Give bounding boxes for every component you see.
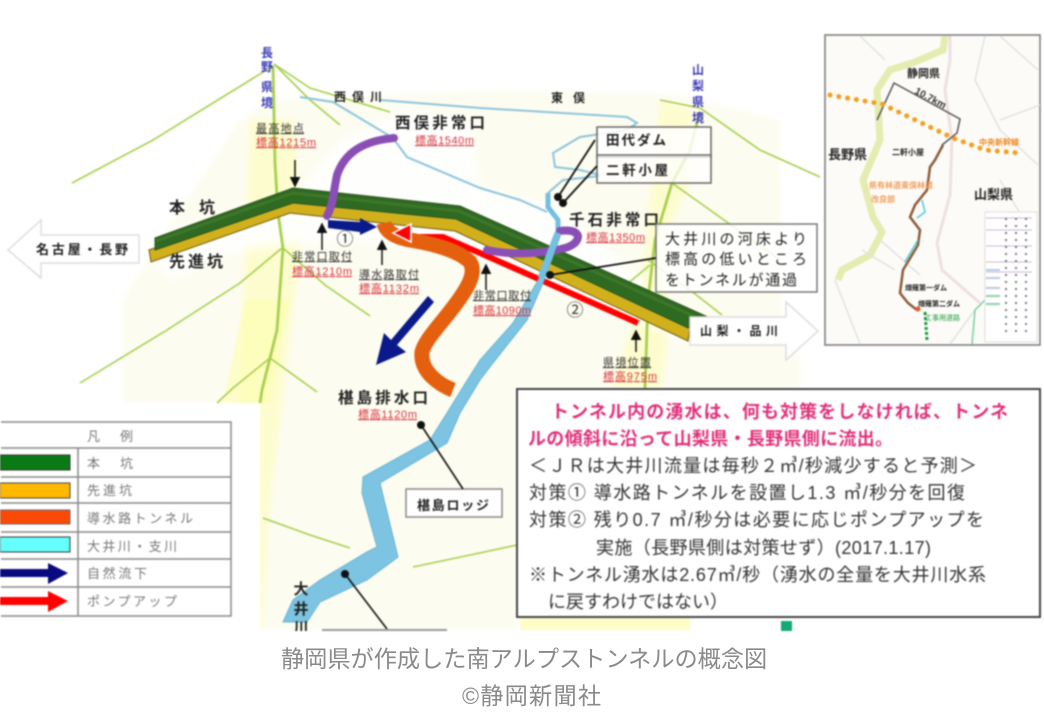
Senjaku exit label xyxy=(569,211,659,244)
left direction arrow: Nagoya and Nagano: 名古屋・長野 xyxy=(36,242,128,257)
prefecture label: Yamanashi border: 県 xyxy=(692,95,704,109)
Hatanagi drainage exit label: 椹島排水口 xyxy=(338,388,428,407)
tunnel name labels: 本 坑 xyxy=(169,198,215,217)
Senjaku exit label: 千石非常口 xyxy=(569,211,659,229)
legend: pilot tunnel xyxy=(0,483,132,498)
Hatanagi drainage exit label: 標高1120m xyxy=(358,407,417,421)
inset: Chuo Shinkansen dotted line xyxy=(830,95,1020,153)
inset: labels: 工事用道路 xyxy=(925,313,960,322)
left direction arrow: Nagoya and Nagano xyxy=(8,220,139,278)
upper Oi River xyxy=(548,193,558,238)
river names xyxy=(334,90,585,105)
river names: 東俣 xyxy=(551,90,585,105)
prefecture border point label: 標高975m xyxy=(603,369,657,383)
red pump-up tunnel xyxy=(410,237,638,323)
orange headrace tunnel xyxy=(384,223,472,390)
inset location map xyxy=(825,35,1040,345)
tunnel name labels xyxy=(169,198,223,271)
text box: countermeasures: ※トンネル湧水は2.67㎥/秒（湧水の全量を大井川水系 xyxy=(529,565,986,585)
pilot tunnel (yellow) xyxy=(149,200,690,341)
emergency exit label 1090m: 非常口取付 xyxy=(473,289,531,302)
inset: labels: 県有林道東俣林道 xyxy=(869,180,933,190)
prefecture label: Nagano border: 境 xyxy=(261,96,273,110)
wide Oi River xyxy=(283,237,560,622)
legend: river: 大井川・支川 xyxy=(87,539,177,554)
thin rivers: Nishimata and Higashimata xyxy=(300,97,637,212)
big blue natural-flow arrow xyxy=(376,296,434,365)
red pump arrowhead xyxy=(393,224,411,242)
inset: labels: 長野県 xyxy=(828,147,867,162)
legend: natural flow: 自然流下 xyxy=(87,566,147,581)
text box: countermeasures: 対策② 残り0.7 ㎥/秒分は必要に応じポンプアップを xyxy=(529,510,984,530)
inset: route line xyxy=(900,145,943,310)
legend table: 凡 例 xyxy=(87,429,133,444)
inset: labels xyxy=(828,66,1019,340)
small green marker xyxy=(781,621,792,631)
Senjaku exit label: 標高1350m xyxy=(586,230,645,244)
highest point label: 最高地点 xyxy=(256,121,304,135)
text box: countermeasures: ＜ＪＲは大井川流量は毎秒２㎥/秒減少すると予測＞ xyxy=(529,456,977,476)
text box: countermeasures: 対策① 導水路トンネルを設置し1.3 ㎥/秒分を回復 xyxy=(529,483,965,503)
legend: main tunnel xyxy=(0,455,133,471)
inset: labels: 中央新幹線 xyxy=(979,137,1019,147)
Nishimata exit label xyxy=(395,114,485,147)
callout: Tashiro dam and Nigenkoya: 田代ダム xyxy=(606,132,666,148)
circled numbers xyxy=(336,230,584,320)
headrace intake label: 標高1132m xyxy=(359,281,419,295)
Oi River label: 大 xyxy=(293,580,309,598)
prefecture label: Nagano border xyxy=(261,46,273,110)
inset: labels: 山梨県 xyxy=(974,187,1013,202)
emergency exit label 1090m xyxy=(473,289,531,317)
prefecture border point label xyxy=(603,356,657,383)
highest point label xyxy=(256,121,316,149)
legend: pilot tunnel: 先進坑 xyxy=(87,483,132,498)
emergency exit label 1090m: 標高1090m xyxy=(473,303,531,317)
river overlay across purple tunnel xyxy=(541,233,558,278)
blue natural-flow arrow 1 xyxy=(328,218,377,235)
purple Senjaku emergency exit tunnel xyxy=(487,231,578,253)
callout: Tashiro dam and Nigenkoya xyxy=(554,127,711,207)
callout: tunnel lower than river bed: 標高の低いところ xyxy=(665,251,807,268)
legend: main tunnel: 本 坑 xyxy=(87,456,133,471)
emergency exit label 1210m: 非常口取付 xyxy=(292,250,352,263)
legend: natural flow xyxy=(0,563,147,584)
text box: countermeasures: ルの傾斜に沿って山梨県・長野県側に流出。 xyxy=(528,429,893,449)
inset: labels: 静岡県 xyxy=(907,66,940,80)
inset: labels: 畑薙第一ダム xyxy=(905,283,947,292)
text box: countermeasures: トンネル内の湧水は、何も対策をしなければ、トンネ xyxy=(551,402,1008,422)
tunnel name labels: 先進坑 xyxy=(169,252,223,271)
Nishimata exit label: 標高1540m xyxy=(415,133,474,147)
inset: tunnel distance bracket xyxy=(877,83,960,145)
white mask below image xyxy=(0,631,1044,723)
purple Nishimata emergency exit tunnel xyxy=(327,138,394,216)
ridge lines xyxy=(72,64,820,567)
legend: river xyxy=(0,537,177,554)
text box: countermeasures xyxy=(517,389,1040,617)
legend: headrace tunnel: 導水路トンネル xyxy=(87,511,193,526)
inset: small legend xyxy=(985,212,1037,342)
prefecture border point label: 県境位置 xyxy=(603,356,651,369)
text box: countermeasures: に戻すわけではない） xyxy=(548,592,728,612)
prefecture label: Nagano border: 長 xyxy=(261,46,273,60)
main tunnel (green) xyxy=(155,188,708,328)
right direction arrow: Yamanashi and Shinagawa: 山梨・品川 xyxy=(700,324,778,338)
headrace intake label xyxy=(359,267,419,295)
callout: tunnel lower than river bed: 大井川の河床より xyxy=(665,231,807,248)
callout: Hatanagi lodge: 椹島ロッジ xyxy=(417,498,489,513)
Oi River label xyxy=(293,580,309,637)
inset: labels: 改良部 xyxy=(871,194,895,204)
Oi River label: 井 xyxy=(293,601,309,618)
prefecture label: Yamanashi border: 山 xyxy=(692,63,704,77)
text box: countermeasures: 実施（長野県側は対策せず）(2017.1.17) xyxy=(596,538,931,558)
callout: Hatanagi lodge xyxy=(406,421,502,517)
Oi River label: 川 xyxy=(293,620,309,637)
caption: 静岡県が作成した南アルプストンネルの概念図 xyxy=(281,646,767,672)
elevation pointer arrows xyxy=(295,160,636,352)
map background xyxy=(0,90,800,631)
river names: 西俣川 xyxy=(334,90,382,104)
legend: pump up xyxy=(0,591,177,612)
inset: labels: 畑薙第二ダム xyxy=(918,299,960,308)
inset: tunnel distance bracket: 10.7km xyxy=(913,86,948,112)
callout: tunnel lower than river bed xyxy=(546,224,817,292)
highest point label: 標高1215m xyxy=(256,135,316,149)
callout: tunnel lower than river bed: をトンネルが通過 xyxy=(665,272,797,289)
legend: headrace tunnel xyxy=(0,510,193,526)
inset: labels: 二軒小屋 xyxy=(892,147,924,157)
prefecture label: Yamanashi border: 梨 xyxy=(692,79,704,93)
headrace intake label: 導水路取付 xyxy=(359,267,419,281)
inset: terrain and boundaries xyxy=(835,36,1040,344)
prefecture label: Yamanashi border: 境 xyxy=(692,111,704,125)
legend: pump up: ポンプアップ xyxy=(87,594,177,609)
circled numbers: ② xyxy=(566,301,584,320)
emergency exit label 1210m xyxy=(292,250,352,278)
circled numbers: ① xyxy=(336,230,354,249)
right direction arrow: Yamanashi and Shinagawa xyxy=(690,302,818,360)
emergency exit label 1210m: 標高1210m xyxy=(292,264,352,278)
Hatanagi drainage exit label xyxy=(338,388,428,421)
Nishimata exit label: 西俣非常口 xyxy=(395,114,485,132)
prefecture label: Yamanashi border xyxy=(692,63,704,125)
legend table xyxy=(0,422,231,616)
prefecture label: Nagano border: 野 xyxy=(261,60,273,74)
prefecture label: Nagano border: 県 xyxy=(261,80,273,94)
copyright line: ©静岡新聞社 xyxy=(462,683,602,709)
callout: Tashiro dam and Nigenkoya: 二軒小屋 xyxy=(606,163,668,178)
river pointer line xyxy=(322,570,447,631)
